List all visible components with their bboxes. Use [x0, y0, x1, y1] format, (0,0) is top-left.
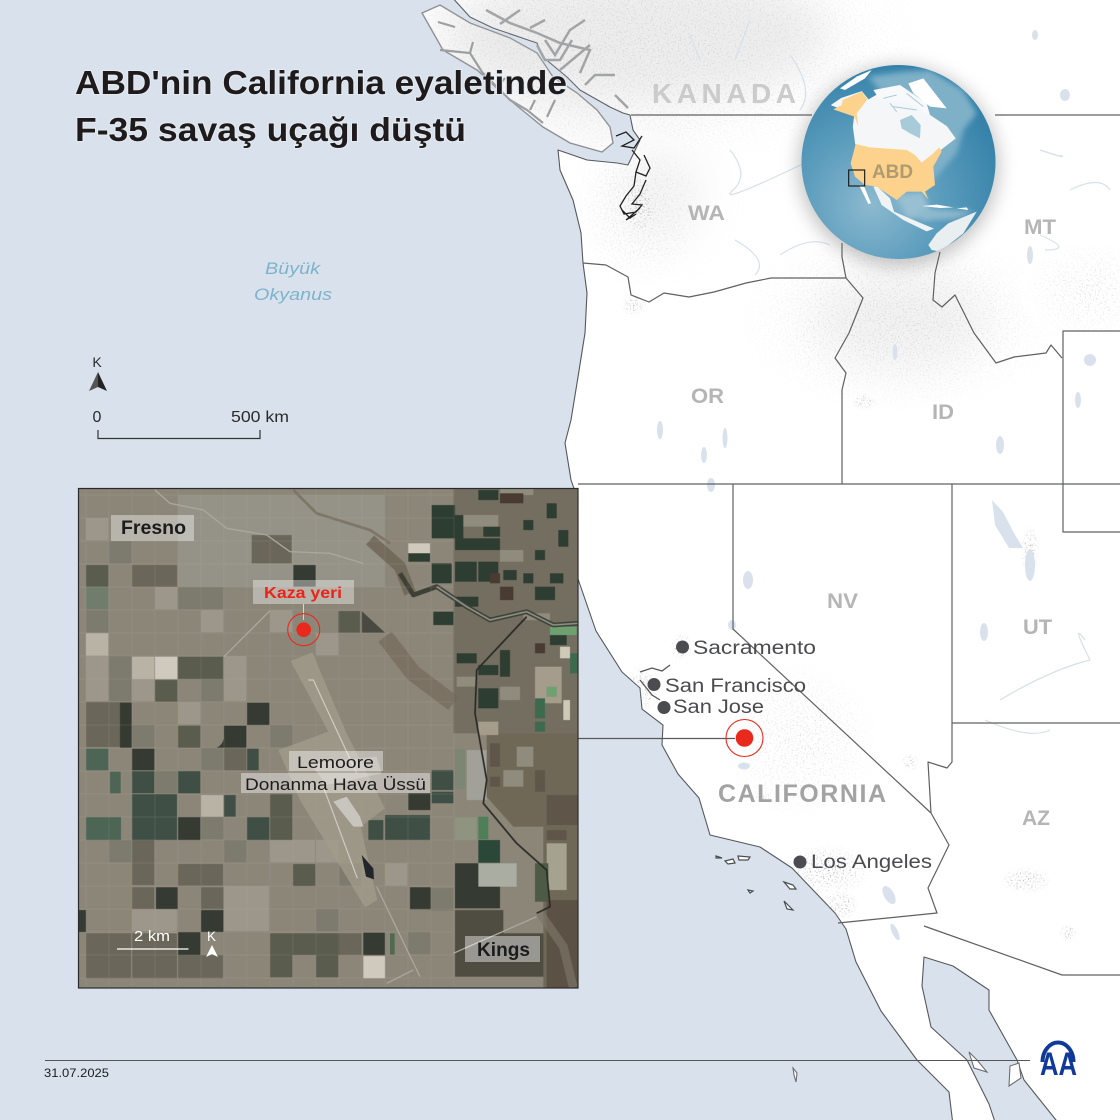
- ocean label: [254, 260, 332, 304]
- scale bar: 0: [93, 409, 102, 426]
- AA logo: AA: [1040, 1047, 1077, 1083]
- title: ABD'nin California eyaletinde: [75, 64, 567, 101]
- lakes: [657, 30, 1096, 941]
- British Columbia inlets: [486, 10, 628, 108]
- locator line to inset: [578, 738, 735, 740]
- footer rule: [45, 1060, 1030, 1062]
- country and state labels: [652, 78, 1056, 830]
- scale bar: 500 km: [231, 409, 289, 426]
- inset north arrow: K: [207, 929, 216, 944]
- Channel Islands: [716, 856, 796, 910]
- Alaska: [833, 92, 867, 126]
- river valley: [370, 540, 410, 593]
- inset label: Lemoore base: Lemoore: [297, 753, 374, 772]
- airbase: [278, 652, 385, 907]
- north arrow: K: [92, 354, 102, 370]
- shallow shelves: [868, 70, 977, 180]
- country and state labels: ID: [932, 401, 954, 424]
- rivers: [690, 20, 1110, 733]
- Puget Sound inlets: [616, 132, 650, 220]
- triangle field: [362, 611, 385, 633]
- city markers and labels: Sacramento: [693, 638, 816, 659]
- inset label: Lemoore base: Donanma Hava Üssü: [245, 775, 426, 794]
- inset label: crash site: Kaza yeri: [264, 585, 342, 602]
- scale bar: [93, 409, 289, 438]
- inset label: Kings: [465, 936, 540, 962]
- inset label: Fresno: Fresno: [121, 517, 186, 539]
- city markers and labels: San Jose: [673, 697, 764, 718]
- inset label: crash site: [253, 580, 354, 604]
- North America land: [832, 92, 955, 163]
- river: [400, 573, 578, 625]
- roads: [155, 490, 537, 983]
- base map: land with coastline: [421, 0, 1120, 1120]
- date: 31.07.2025: [44, 1068, 109, 1080]
- USA: [851, 144, 942, 200]
- top centre pale fields: [178, 495, 385, 587]
- ocean label: Büyük: [265, 260, 321, 278]
- right farm block: [453, 488, 578, 733]
- country and state labels: KANADA: [652, 78, 796, 109]
- crash site marker on main map: [726, 720, 763, 756]
- inset scale bar: [117, 928, 188, 949]
- round corner field: [217, 726, 225, 748]
- title: F-35 savaş uçağı düştü: [75, 111, 466, 148]
- ocean label: Okyanus: [254, 286, 332, 304]
- inset scale bar: 2 km: [134, 928, 170, 945]
- country and state labels: OR: [691, 385, 724, 408]
- Bay Area inlets: [640, 665, 670, 700]
- inset label: Fresno: [111, 515, 194, 541]
- upper creek: [293, 490, 390, 543]
- canal: [475, 617, 550, 913]
- inset label: Lemoore base: [241, 751, 430, 794]
- inset label: Kings: Kings: [477, 939, 530, 961]
- panel: satellite inset: [78, 488, 578, 988]
- country and state labels: UT: [1023, 616, 1052, 639]
- Baja islands: [793, 1052, 1021, 1086]
- globe label: ABD: [872, 162, 913, 183]
- field grid lines: [78, 488, 454, 988]
- title: [75, 64, 567, 148]
- Mexico and Central America: [873, 187, 934, 231]
- country and state labels: CALIFORNIA: [718, 780, 886, 808]
- Caribbean islands: [922, 205, 968, 210]
- country and state labels: AZ: [1022, 807, 1050, 830]
- country and state labels: MT: [1024, 216, 1056, 239]
- city markers and labels: [648, 638, 932, 873]
- north arrow: [89, 354, 107, 391]
- terrain texture: [428, 0, 1120, 1082]
- globe locator: [798, 65, 998, 266]
- inset crash marker: [288, 604, 320, 646]
- city markers and labels: San Francisco: [665, 676, 806, 697]
- city markers and labels: Los Angeles: [811, 852, 932, 873]
- state borders: [578, 115, 1120, 975]
- inset north arrow: [206, 929, 218, 957]
- country and state labels: NV: [827, 590, 858, 613]
- South America: [928, 212, 977, 252]
- locator square: [849, 170, 865, 186]
- country and state labels: WA: [688, 202, 725, 225]
- Vancouver Island: [422, 5, 613, 152]
- Vancouver Island inlets: [438, 22, 555, 123]
